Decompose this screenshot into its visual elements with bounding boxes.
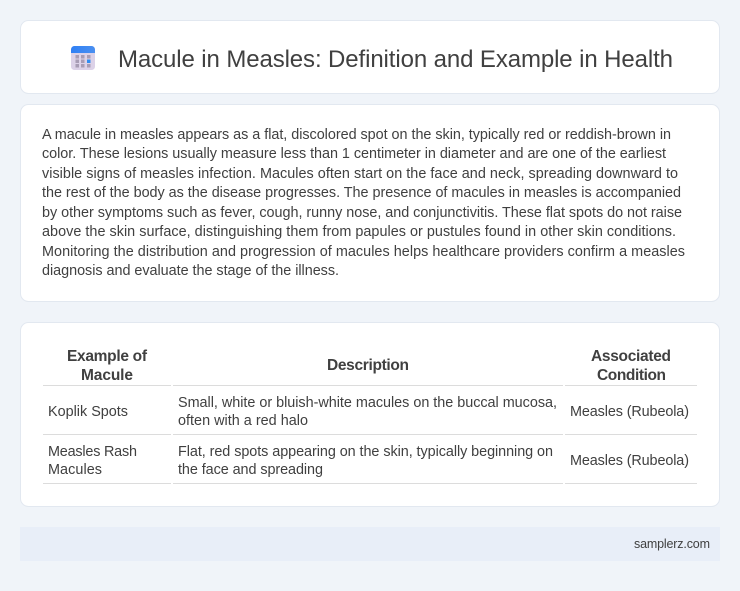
table row: Measles Rash Macules: [48, 444, 689, 478]
text block: definition paragraph: visible signs of measles infection. Macules often start on the face and neck, spreading downward to: [42, 166, 678, 182]
table row: Measles Rash Macules: Measles (Rubeola): [570, 453, 689, 469]
text block: definition paragraph: [42, 127, 685, 279]
table header row: Description: [327, 357, 409, 374]
footer source text: samplerz.com: [634, 537, 710, 551]
panel: header card: [20, 20, 720, 94]
table row: Measles Rash Macules: the face and spreading: [178, 462, 323, 478]
text block: definition paragraph: color. These lesions usually measure less than 1 centimeter in diameter and are one of the earliest: [42, 146, 666, 162]
text block: definition paragraph: by other symptoms such as fever, cough, runny nose, and conjunctivitis. These flat spots do not raise: [42, 205, 682, 221]
table header row: Condition: [597, 367, 666, 384]
text block: definition paragraph: the rest of the body as the disease progresses. The presence of macules in measles is accompanied: [42, 185, 681, 201]
table row: Koplik Spots: [48, 395, 689, 429]
table row: Koplik Spots: Koplik Spots: [48, 404, 128, 420]
table header row: Associated: [591, 348, 671, 365]
text block: definition paragraph: A macule in measles appears as a flat, discolored spot on the skin, typically red or reddish-brown in: [42, 127, 671, 143]
table header row: [67, 348, 671, 384]
table header row: Macule: [81, 367, 133, 384]
table row: Measles Rash Macules: Flat, red spots appearing on the skin, typically beginning on: [178, 444, 553, 460]
table header row: Example of: [67, 348, 148, 365]
panel: definition paragraph card: [20, 104, 720, 302]
text block: definition paragraph: diagnosis and evaluate the stage of the illness.: [42, 263, 339, 279]
title: Macule in Measles: Definition and Example in Health: [118, 46, 673, 73]
text block: definition paragraph: above the skin surface, distinguishing them from papules or pustules found in other skin conditions.: [42, 224, 676, 240]
text block: definition paragraph: Monitoring the distribution and progression of macules helps healthcare providers confirm a measles: [42, 244, 685, 260]
icon: calendar: [71, 46, 95, 70]
panel: table card: [20, 322, 720, 506]
table row: Koplik Spots: Measles (Rubeola): [570, 404, 689, 420]
table row: Measles Rash Macules: Macules: [48, 462, 102, 478]
table row: Koplik Spots: Small, white or bluish-white macules on the buccal mucosa,: [178, 395, 557, 411]
table row: Measles Rash Macules: Measles Rash: [48, 444, 137, 460]
footer bar: [20, 527, 720, 561]
table row: Koplik Spots: often with a red halo: [178, 413, 308, 429]
